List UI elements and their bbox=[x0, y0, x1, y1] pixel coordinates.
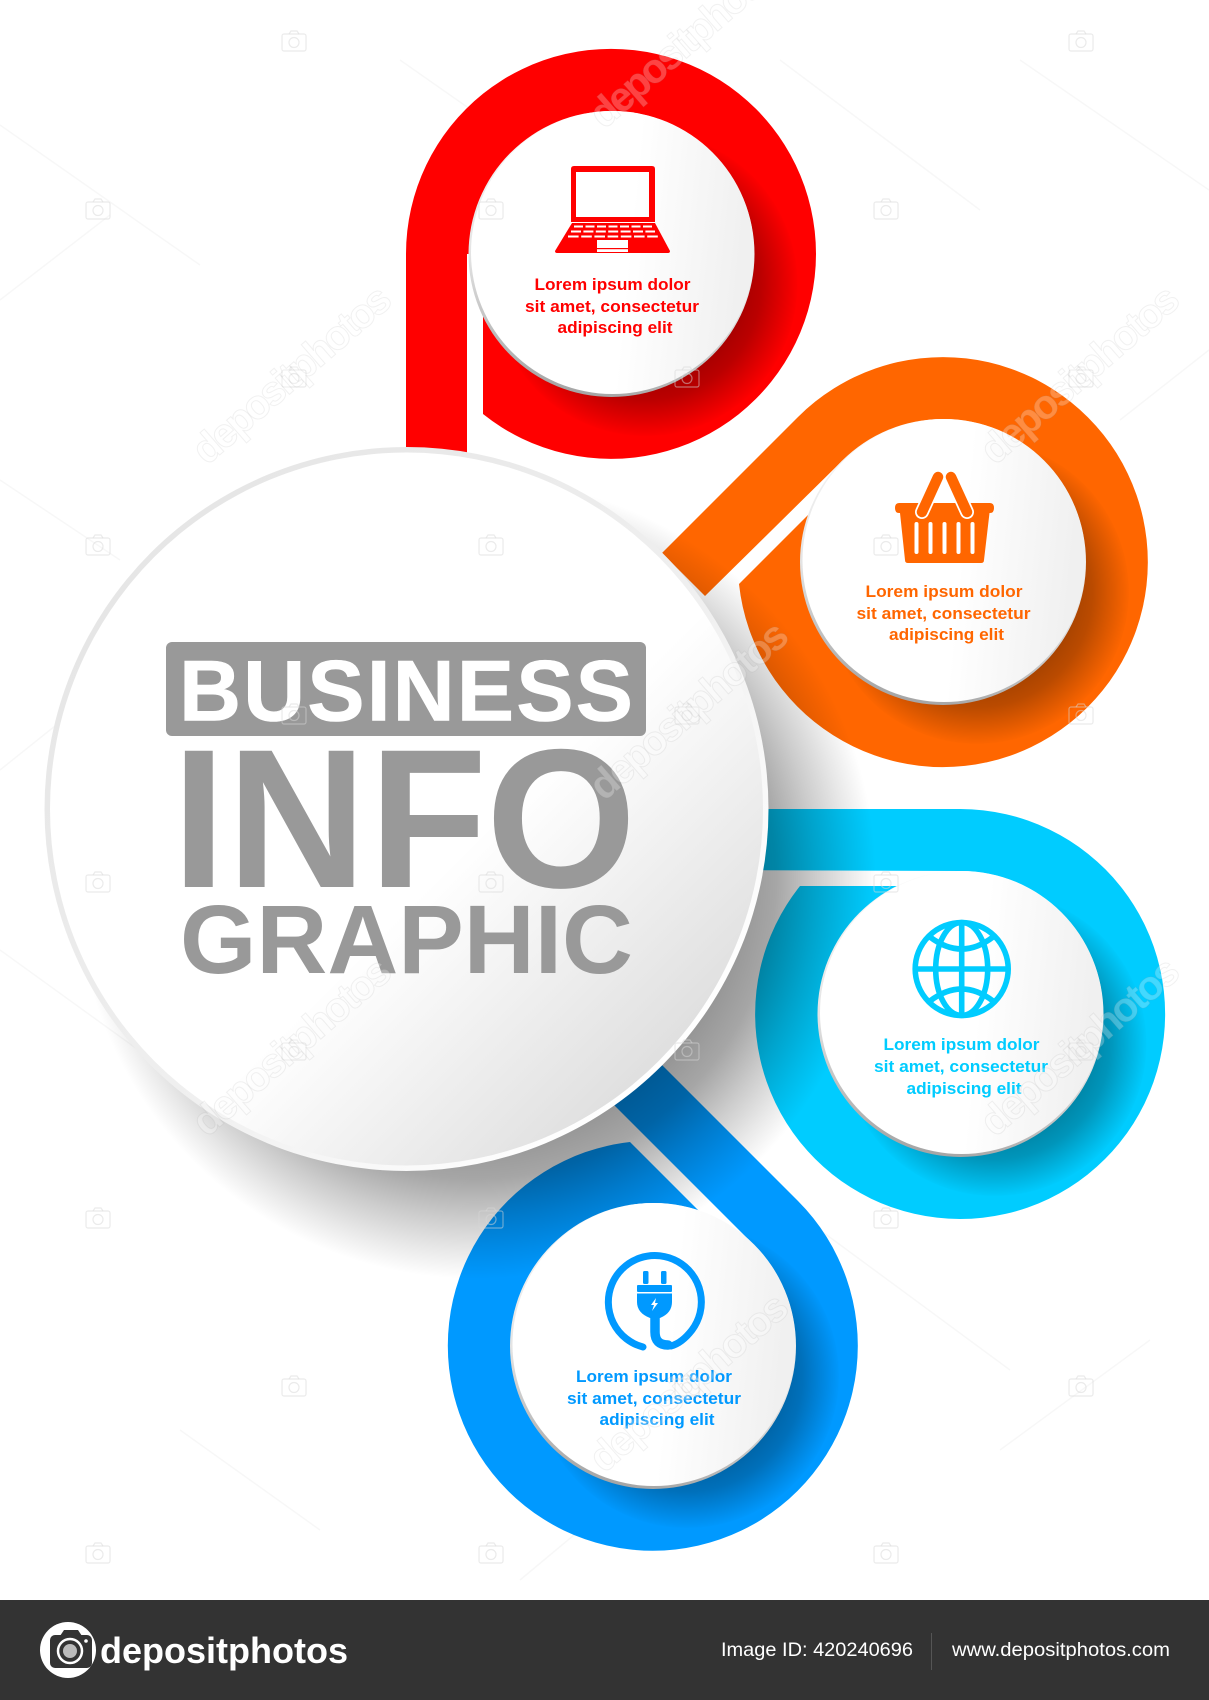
icon: basket bbox=[895, 477, 994, 563]
icon: laptop bbox=[555, 166, 670, 253]
text: Lorem ipsum dolor bbox=[866, 582, 1023, 601]
title: GRAPHIC: GRAPHIC bbox=[180, 885, 633, 994]
text: adipiscing elit bbox=[600, 1410, 715, 1429]
footer logo text: depositphotos bbox=[100, 1630, 348, 1671]
watermark texts: depositphotos bbox=[971, 947, 1188, 1145]
text: adipiscing elit bbox=[906, 1079, 1022, 1098]
footer bar bbox=[0, 1600, 1209, 1700]
text: Lorem ipsum dolor bbox=[534, 275, 691, 294]
text: sit amet, consectetur bbox=[874, 1057, 1049, 1076]
text: sit amet, consectetur bbox=[856, 604, 1031, 623]
watermark texts: depositphotos bbox=[183, 275, 400, 473]
watermark texts: depositphotos bbox=[183, 947, 400, 1145]
ring: red bbox=[406, 49, 816, 500]
panel: red item bbox=[468, 111, 754, 397]
watermark texts: depositphotos bbox=[580, 1283, 797, 1481]
shadow: red disc on ring bbox=[521, 150, 794, 432]
text: sit amet, consectetur bbox=[567, 1389, 742, 1408]
text: Lorem ipsum dolor bbox=[576, 1367, 733, 1386]
text: adipiscing elit bbox=[889, 625, 1004, 644]
footer image id: Image ID: 420240696 bbox=[721, 1639, 913, 1661]
text bbox=[525, 275, 700, 337]
shadow: main circle bbox=[76, 479, 876, 1279]
title: INFO: INFO bbox=[172, 709, 636, 930]
text bbox=[874, 1035, 1049, 1098]
main circle rim bbox=[44, 447, 768, 1171]
text bbox=[856, 582, 1031, 644]
text: sit amet, consectetur bbox=[525, 297, 700, 316]
ring: blue bbox=[448, 1003, 858, 1551]
disc bbox=[468, 111, 754, 397]
main circle face bbox=[50, 452, 763, 1166]
disc bbox=[510, 1203, 796, 1489]
text bbox=[567, 1367, 742, 1429]
text: adipiscing elit bbox=[558, 318, 673, 337]
icon: plug bbox=[608, 1256, 701, 1347]
icon: globe bbox=[915, 922, 1008, 1016]
panel: cyan item bbox=[818, 871, 1104, 1157]
disc bbox=[818, 871, 1104, 1157]
ring: cyan bbox=[700, 809, 1165, 1219]
panel: main circle bbox=[44, 447, 768, 1171]
panel: blue item bbox=[510, 1203, 796, 1489]
watermark texts bbox=[183, 0, 1188, 1481]
footer url: www.depositphotos.com bbox=[951, 1639, 1170, 1661]
watermark texts: depositphotos bbox=[971, 275, 1188, 473]
title block bbox=[166, 642, 646, 994]
text: Lorem ipsum dolor bbox=[884, 1035, 1040, 1054]
footer divider bbox=[930, 1633, 932, 1670]
watermark camera icons bbox=[86, 31, 1093, 1563]
title: BUSINESS label: BUSINESS bbox=[179, 644, 633, 740]
disc bbox=[800, 419, 1086, 705]
ring: orange bbox=[662, 357, 1148, 767]
shadow: orange disc on ring bbox=[852, 458, 1126, 740]
footer logo mark bbox=[40, 1622, 96, 1678]
shadow: cyan disc on ring bbox=[870, 910, 1143, 1192]
watermark texts: depositphotos bbox=[580, 611, 797, 809]
shadow: blue disc on ring bbox=[562, 1242, 836, 1524]
panel: orange item bbox=[800, 419, 1086, 705]
